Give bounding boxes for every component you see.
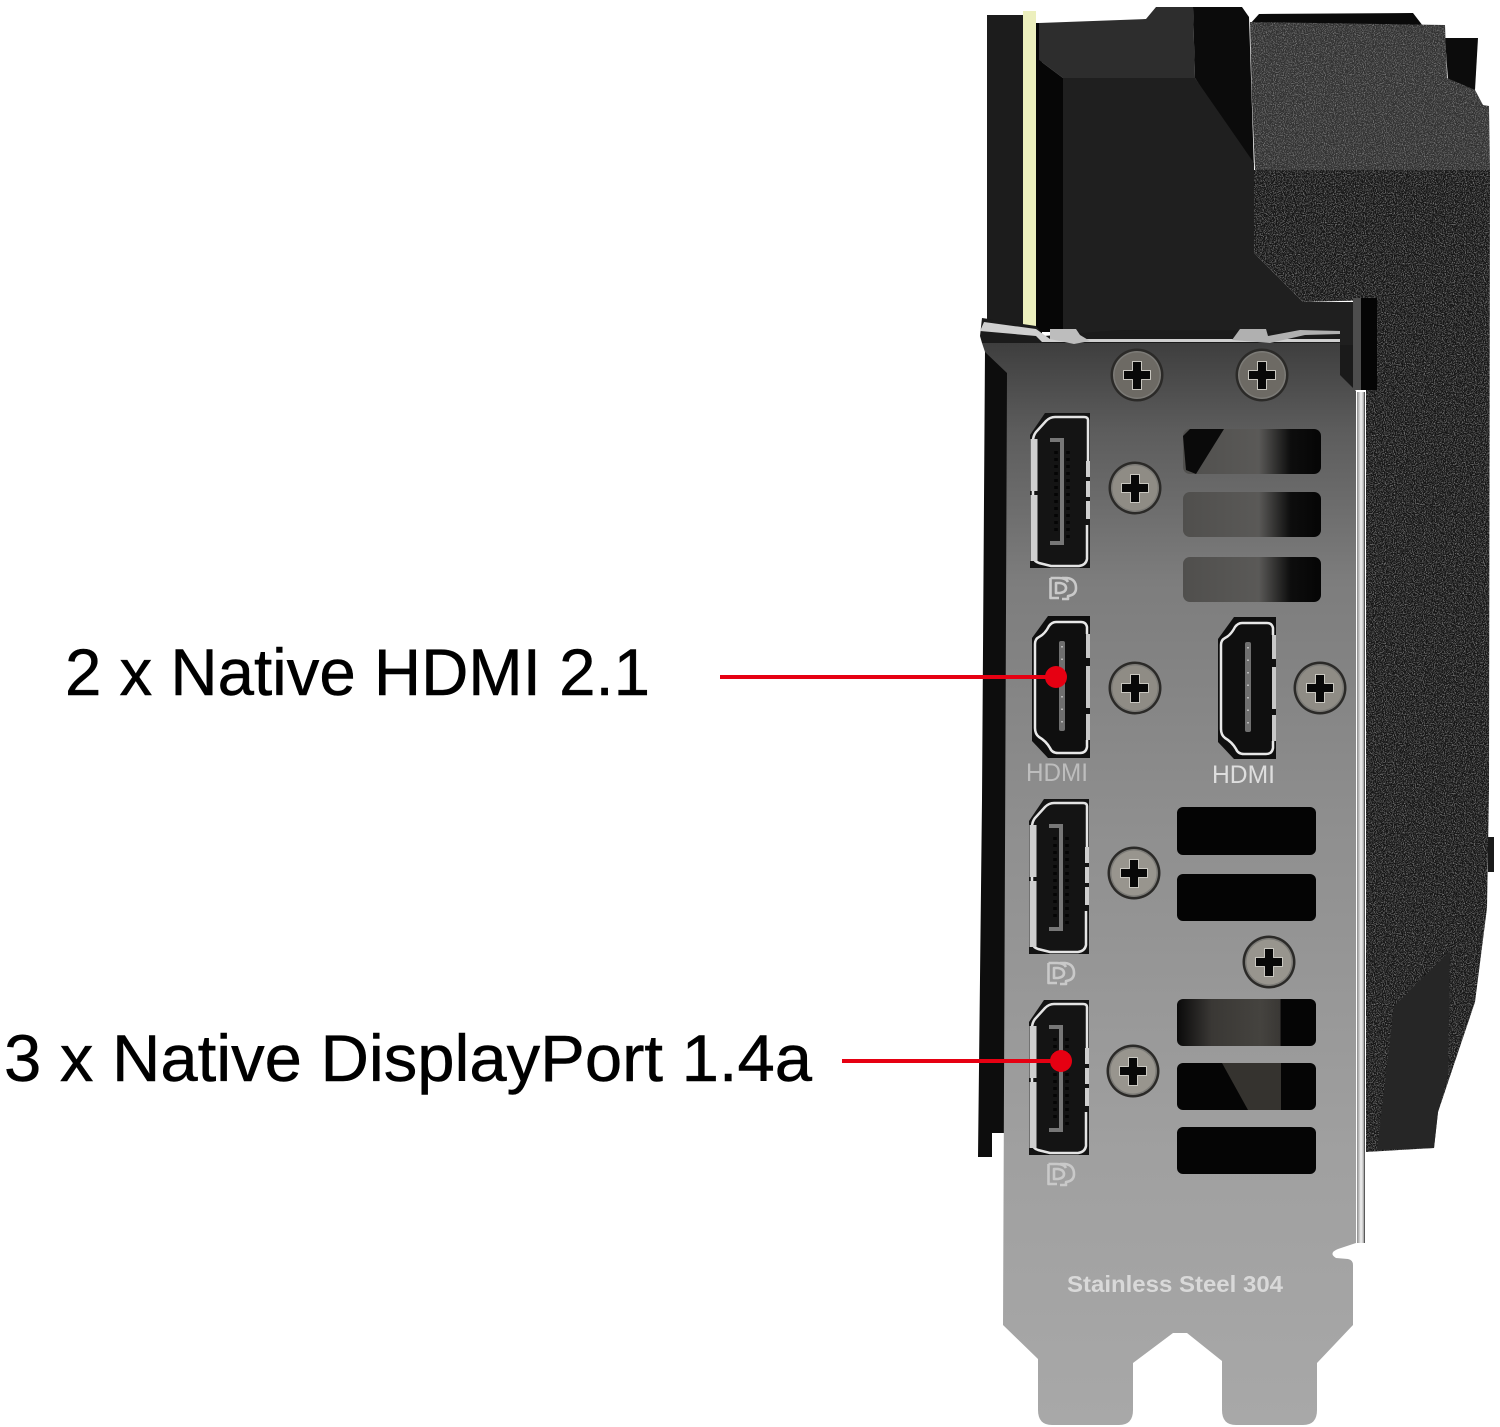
- gap shadow behind shroud: [1036, 23, 1042, 333]
- lower left black strip: [978, 350, 1010, 1157]
- top flange: [980, 318, 1340, 344]
- shroud black side: [1036, 58, 1063, 332]
- bracket material label: Stainless Steel 304: [1067, 1271, 1283, 1297]
- DisplayPort logos: [1048, 578, 1076, 1185]
- pale yellow PCB edge: [1023, 11, 1036, 326]
- mounting screws: [1106, 348, 1346, 1098]
- lower vent slots: [1177, 999, 1316, 1046]
- bracket plate: [982, 343, 1356, 1425]
- textured main block: [1254, 170, 1490, 1152]
- HDMI port label right: HDMI: [1212, 761, 1275, 789]
- side knob: [1488, 837, 1494, 872]
- HDMI leader line: [720, 666, 1067, 688]
- bracket return strip: [1353, 298, 1377, 390]
- HDMI port label left: HDMI: [1026, 759, 1088, 787]
- HDMI callout text: 2 x Native HDMI 2.1: [65, 635, 650, 709]
- left black backplate strip: [987, 15, 1023, 325]
- textured upper block: [1250, 22, 1490, 170]
- bracket right highlight edge: [1357, 392, 1365, 1243]
- upper vent slots: [1183, 429, 1321, 474]
- DisplayPort connectors: [1029, 413, 1090, 1155]
- shroud upper facet: [1039, 7, 1195, 78]
- rear black notch: [1445, 38, 1478, 90]
- middle vent slots: [1177, 807, 1316, 855]
- lower chamfer facet: [1377, 951, 1450, 1150]
- stainless steel bracket: [980, 318, 1365, 1425]
- DisplayPort leader line: [842, 1050, 1072, 1072]
- callout: HDMI: [65, 635, 1067, 709]
- top black sliver: [1250, 13, 1423, 26]
- vent slots: [1177, 429, 1321, 1174]
- DisplayPort callout text: 3 x Native DisplayPort 1.4a: [4, 1021, 812, 1095]
- shroud black wedge: [1193, 7, 1254, 170]
- HDMI connectors: [1032, 616, 1276, 759]
- shroud main panel: [1063, 78, 1353, 345]
- graphics card body: [978, 7, 1494, 1157]
- callout: DisplayPort: [4, 1021, 1072, 1095]
